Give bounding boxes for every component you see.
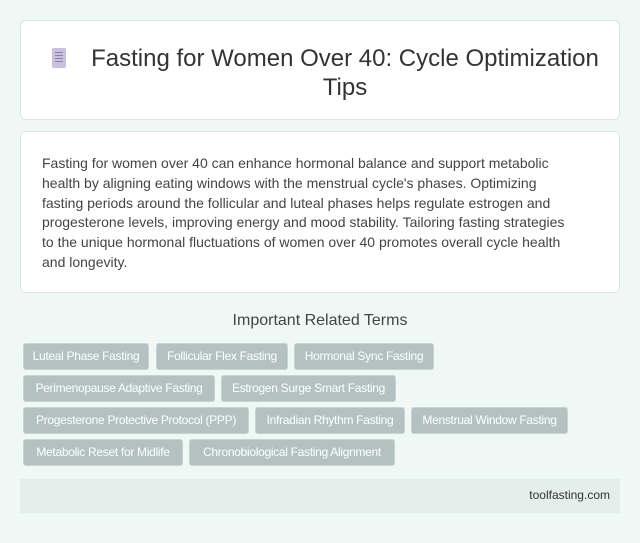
tag: Perimenopause Adaptive Fasting: [35, 381, 203, 395]
tag: Metabolic Reset for Midlife: [36, 445, 170, 459]
panel: header: [20, 20, 620, 120]
text block: description: Fasting for women over 40 can enhance hormonal balance and support metabolic health by aligning eating windows with the menstrual cycle's phases. Optimizing fasting periods around the follicular and luteal phases helps regulate estrogen and progesterone levels, improving energy and mood stability. Tailoring fasting strategies to the unique hormonal fluctuations of women over 40 promotes overall cycle health and longevity.: [42, 155, 564, 270]
heading: related terms: Important Related Terms: [233, 312, 407, 329]
tag: Estrogen Surge Smart Fasting: [232, 381, 385, 395]
tag: Progesterone Protective Protocol (PPP): [36, 413, 236, 427]
tag: [222, 376, 395, 401]
panel: description: [20, 131, 620, 293]
title: Fasting for Women Over 40: Cycle Optimization Tips: [91, 45, 599, 101]
tag: Chronobiological Fasting Alignment: [203, 445, 381, 459]
icon: document: [52, 48, 66, 68]
tag: [295, 344, 433, 369]
tag: [256, 408, 404, 433]
tag: Menstrual Window Fasting: [422, 413, 557, 427]
tag: [190, 440, 394, 465]
tag: [157, 344, 287, 369]
tag: Hormonal Sync Fasting: [305, 349, 423, 363]
tag: [24, 376, 214, 401]
footer text: toolfasting.com: [529, 488, 610, 502]
tag: Follicular Flex Fasting: [167, 349, 277, 363]
tag: [24, 440, 182, 465]
tag: [24, 344, 148, 369]
tag: Luteal Phase Fasting: [33, 349, 139, 363]
tag: [24, 408, 248, 433]
tag: Infradian Rhythm Fasting: [267, 413, 393, 427]
tag: [412, 408, 567, 433]
footer: [20, 479, 620, 513]
